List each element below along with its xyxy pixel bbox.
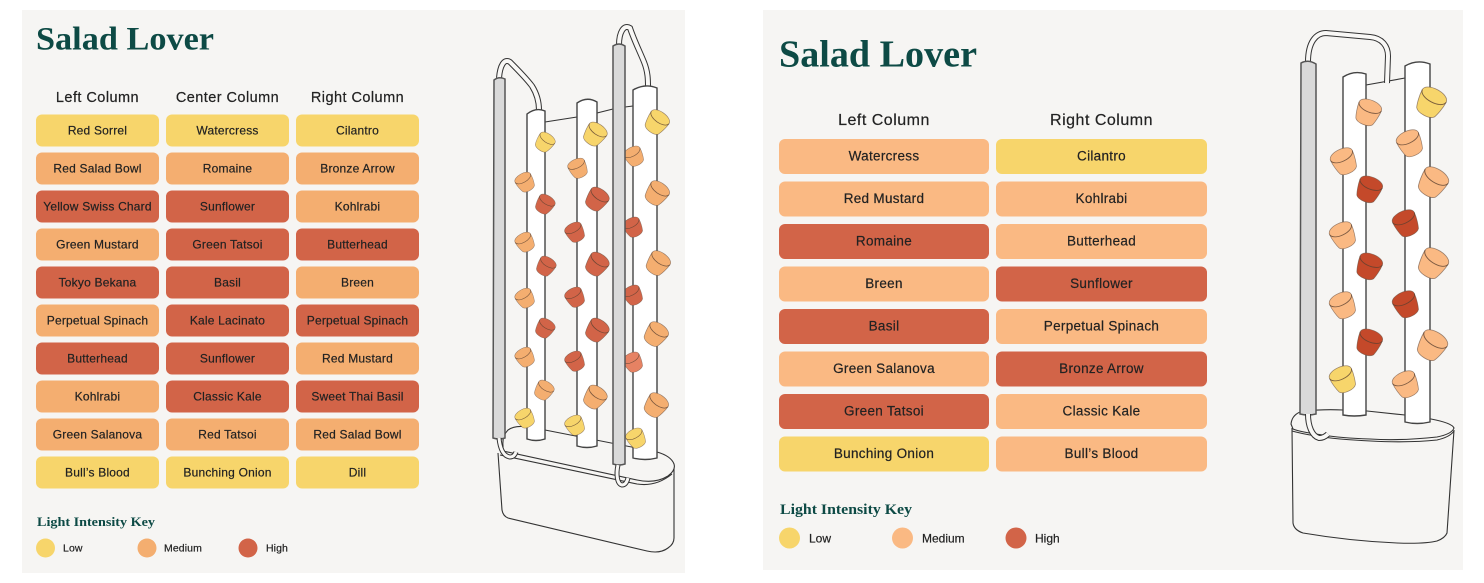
cell: Green Tatsoi	[192, 238, 263, 252]
legend item: high: High	[266, 542, 288, 554]
cell: Green Salanova	[833, 361, 935, 376]
legend item: medium	[138, 538, 202, 558]
cell	[166, 456, 289, 488]
cell	[36, 380, 159, 412]
cell	[996, 352, 1207, 386]
cell	[779, 436, 989, 472]
cell	[296, 304, 419, 336]
cell	[996, 224, 1207, 259]
cell	[166, 152, 289, 184]
heading: left column: Left Column	[838, 112, 930, 129]
heading: left column: Left Column	[56, 90, 139, 106]
cell	[36, 456, 159, 488]
cell	[779, 309, 989, 344]
cell: Red Sorrel	[68, 124, 127, 138]
back frame line	[1366, 78, 1405, 85]
cell: Watercress	[849, 148, 919, 164]
cell	[996, 266, 1207, 302]
light rod: left	[493, 78, 505, 439]
legend item: high: High	[1035, 532, 1060, 546]
cell: Cilantro	[336, 124, 379, 138]
cell: Sunflower	[1070, 276, 1133, 291]
cell: Sweet Thai Basil	[311, 390, 404, 404]
cell: Green Salanova	[53, 428, 142, 442]
column: left	[36, 90, 159, 488]
cell: Butterhead	[67, 352, 128, 366]
cell: Butterhead	[327, 238, 388, 252]
legend: light intensity key	[779, 502, 1060, 548]
cell: Red Mustard	[322, 352, 393, 366]
hose: right	[619, 27, 648, 87]
cell	[36, 418, 159, 450]
cell	[296, 152, 419, 184]
cell: Kohlrabi	[75, 390, 120, 404]
cell	[166, 342, 289, 374]
cell: Romaine	[856, 234, 912, 248]
cell	[779, 352, 989, 386]
cell: Butterhead	[1067, 234, 1136, 248]
cable	[1308, 414, 1328, 438]
cell	[779, 139, 989, 174]
cell	[36, 152, 159, 184]
growing tube: right	[633, 86, 657, 460]
cell	[779, 266, 989, 302]
cell: Perpetual Spinach	[307, 314, 408, 328]
cell: Breen	[341, 276, 374, 290]
cell: Green Mustard	[56, 238, 139, 252]
cell	[166, 304, 289, 336]
plant pods: left tube	[513, 130, 558, 431]
cell: Dill	[349, 466, 366, 480]
legend: light intensity key	[36, 514, 288, 558]
column: right	[296, 90, 419, 488]
back frame lines	[545, 106, 633, 122]
cell	[166, 190, 289, 222]
cell	[166, 418, 289, 450]
plant pods: center tube	[563, 119, 612, 438]
cell	[296, 456, 419, 488]
legend item: high	[238, 538, 288, 558]
cell: Basil	[869, 318, 899, 334]
hose: left	[499, 61, 539, 110]
cell	[996, 309, 1207, 344]
cell	[296, 190, 419, 222]
light rod	[1300, 61, 1316, 415]
cell	[36, 342, 159, 374]
cell	[996, 182, 1207, 216]
cell	[996, 394, 1207, 429]
cell: Basil	[214, 276, 241, 290]
cell: Watercress	[196, 124, 259, 138]
heading: right column: Right Column	[1050, 112, 1153, 129]
cell	[36, 114, 159, 146]
cell: Tokyo Bekana	[59, 276, 137, 290]
title: Salad Lover	[36, 22, 214, 58]
panel: right tower guide	[763, 10, 1463, 570]
cell: Sunflower	[200, 200, 255, 214]
title: Salad Lover	[779, 34, 977, 76]
legend title: Light Intensity Key	[780, 502, 913, 518]
legend item: low: Low	[809, 532, 831, 546]
legend item: low: Low	[63, 542, 83, 554]
cell: Bull’s Blood	[65, 466, 130, 480]
heading: right column: Right Column	[311, 90, 404, 106]
panel: left tower guide	[22, 10, 685, 573]
cell	[166, 228, 289, 260]
cell	[36, 304, 159, 336]
cell: Classic Kale	[193, 390, 262, 404]
planter base	[498, 426, 674, 552]
cell: Kale Lacinato	[190, 314, 265, 328]
cell	[296, 418, 419, 450]
cell	[296, 114, 419, 146]
plant pods: left tube	[1327, 96, 1385, 396]
plant pods: right tube	[621, 107, 673, 451]
cell: Perpetual Spinach	[47, 314, 148, 328]
cell	[36, 228, 159, 260]
cell	[296, 342, 419, 374]
cell: Breen	[865, 276, 903, 291]
column: center	[166, 90, 289, 488]
cell: Bronze Arrow	[1059, 361, 1144, 376]
hose	[1308, 33, 1388, 83]
cell: Bull’s Blood	[1065, 446, 1138, 461]
illustration: three-column tower	[493, 27, 674, 552]
illustration: two-column tower	[1291, 33, 1454, 543]
legend title: Light Intensity Key	[37, 514, 156, 529]
cable: left	[499, 438, 516, 457]
cell: Red Salad Bowl	[53, 162, 142, 176]
cell: Cilantro	[1077, 148, 1126, 164]
cell: Yellow Swiss Chard	[43, 200, 152, 214]
cell	[996, 436, 1207, 472]
cell: Bunching Onion	[183, 466, 272, 480]
legend item: medium: Medium	[164, 542, 202, 554]
cell	[996, 139, 1207, 174]
cell: Perpetual Spinach	[1044, 318, 1159, 334]
cell	[296, 380, 419, 412]
heading: center column: Center Column	[176, 90, 279, 106]
cell: Bronze Arrow	[320, 162, 395, 176]
growing tube: left	[1343, 73, 1366, 416]
cell: Green Tatsoi	[844, 404, 924, 418]
legend item: medium: Medium	[922, 532, 965, 546]
cell: Classic Kale	[1063, 404, 1140, 418]
cell	[779, 182, 989, 216]
cell	[779, 394, 989, 429]
planter base	[1291, 410, 1454, 543]
legend item: medium	[892, 528, 965, 548]
legend item: high	[1006, 528, 1060, 548]
cable: right	[617, 465, 628, 485]
cell	[166, 266, 289, 298]
cell: Sunflower	[200, 352, 255, 366]
cell	[296, 266, 419, 298]
column: right	[996, 112, 1207, 472]
cell: Romaine	[203, 162, 252, 176]
cell	[36, 190, 159, 222]
cell: Red Salad Bowl	[313, 428, 402, 442]
light rod: right	[613, 44, 625, 465]
plant pods: right tube	[1390, 83, 1452, 401]
growing tube: center	[577, 99, 597, 447]
cell: Kohlrabi	[335, 200, 380, 214]
column: left	[779, 112, 989, 472]
cell	[36, 266, 159, 298]
cell	[166, 380, 289, 412]
cell	[296, 228, 419, 260]
growing tube: left	[527, 110, 545, 440]
cell: Kohlrabi	[1076, 191, 1127, 206]
legend item: low	[36, 538, 83, 558]
cell: Red Mustard	[844, 191, 924, 206]
growing tube: right	[1405, 62, 1430, 424]
legend item: low	[779, 528, 831, 548]
cell: Bunching Onion	[834, 446, 934, 461]
cell: Red Tatsoi	[198, 428, 257, 442]
cell	[166, 114, 289, 146]
cell	[779, 224, 989, 259]
